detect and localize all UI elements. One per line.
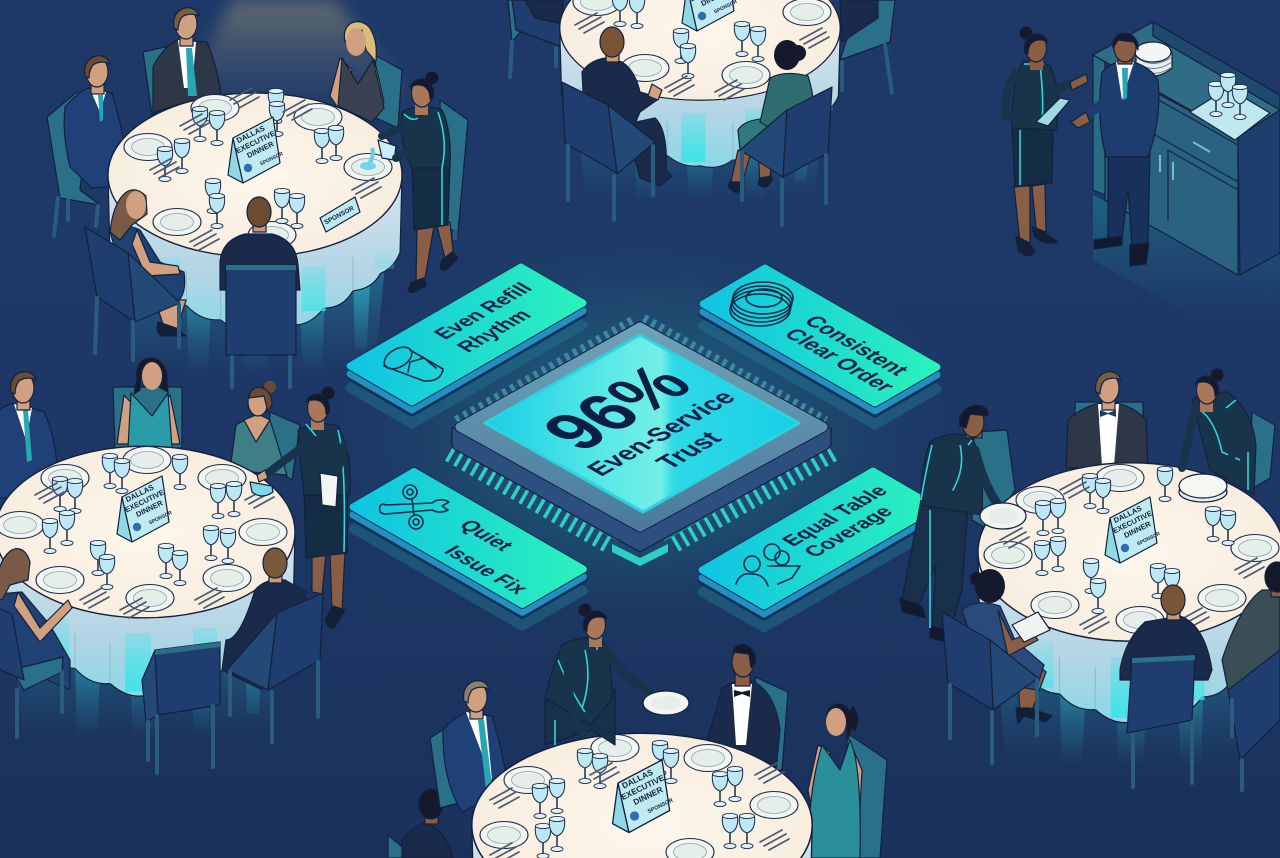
table sign: DINNER [1122, 519, 1153, 540]
table top with skirt [108, 93, 402, 373]
panel text: Clear Order [779, 325, 901, 396]
table sign: DINNER [632, 785, 664, 807]
chair behind waiter [972, 430, 1015, 530]
bottom-left man and chair [388, 789, 453, 858]
table sign: EXECUTIVE [123, 488, 166, 514]
table sign: SPONSOR [647, 798, 674, 815]
table sign: DALLAS [124, 483, 155, 504]
seated woman from behind with chair [85, 190, 186, 360]
table sign: EXECUTIVE [620, 773, 666, 802]
chip top edge pins [456, 318, 826, 420]
partly visible diners on far side of table [508, 0, 895, 93]
top-right service cart group [1005, 22, 1280, 320]
panel text [439, 517, 534, 598]
man in tuxedo with chair [708, 645, 788, 772]
table sign: EXECUTIVE [1111, 509, 1154, 535]
table sign [612, 760, 676, 832]
table sign: Dallas Executive Dinner: EXECUTIVE [234, 129, 277, 155]
panel text: Equal Table [777, 482, 893, 550]
empty chair at front [142, 642, 220, 773]
service cart [1093, 22, 1280, 275]
table sign: DINNER [134, 498, 165, 519]
small sponsor card [320, 197, 360, 232]
chip label: Trust [650, 428, 729, 473]
table sign: DALLAS [1112, 504, 1143, 525]
waiter in dark uniform serving [900, 405, 1026, 642]
stat panel: Consistent Clear Order [703, 268, 937, 425]
table top with skirt [472, 733, 812, 858]
stat panel: Quiet Issue Fix [353, 472, 583, 626]
place settings [124, 88, 392, 250]
panel text: Coverage [799, 503, 898, 561]
table top with skirt [560, 0, 840, 202]
top-left table group [47, 8, 468, 387]
seated man at far right with chair [1222, 562, 1280, 790]
seated woman front-left with chair [0, 549, 72, 737]
small sponsor card: SPONSOR [323, 205, 356, 226]
table sign: Dallas Executive Dinner [228, 117, 286, 183]
place settings [984, 464, 1279, 634]
chip base and rim [452, 428, 831, 552]
stat panel: Equal Table Coverage [702, 471, 935, 628]
floor reflection under cart [1093, 195, 1280, 320]
waitress clearing a plate [545, 604, 689, 745]
table sign: SPONSOR [1136, 531, 1162, 547]
man in navy suit at far left [0, 372, 58, 498]
table sign: Dallas Executive Dinner: DINNER [245, 139, 276, 160]
chip label: Even-Service [581, 387, 742, 480]
place settings [480, 734, 798, 858]
seated man right from behind with chair [222, 548, 323, 742]
icon: people [736, 544, 800, 586]
panel text: Even Refill [429, 280, 538, 343]
table sign: Dallas Executive Dinner: SPONSOR [259, 151, 285, 167]
table sign: SPONSOR [148, 510, 174, 526]
table top with skirt [978, 463, 1280, 767]
man from behind with chair [1120, 585, 1212, 787]
middle-right table group [900, 368, 1280, 790]
icon: stack of plates [730, 282, 793, 326]
headline number: 96% [524, 353, 709, 461]
blonde woman with chair [330, 22, 402, 128]
chair behind waitress [440, 100, 468, 238]
stat panel: Even Refill Rhythm [350, 267, 583, 424]
table sign: Dallas Executive Dinner: DALLAS [235, 124, 266, 145]
table sign [682, 0, 740, 31]
middle-left table group [0, 358, 350, 773]
chip screen [485, 335, 799, 512]
panel text: Quiet [454, 517, 518, 554]
man seen from behind with chair [562, 27, 672, 220]
table sign [1105, 497, 1163, 563]
panel text: Rhythm [452, 306, 537, 356]
table top with skirt [0, 446, 295, 739]
man in navy suit with chair [47, 56, 124, 236]
table sign [117, 476, 175, 542]
waitress clearing plates [1179, 368, 1256, 502]
waitress with tablet [1005, 26, 1088, 256]
table sign: DALLAS [621, 768, 655, 791]
chair behind waitress [1250, 412, 1275, 490]
panel text: Issue Fix [439, 543, 534, 598]
woman in green with chair [230, 381, 300, 480]
water pitcher [250, 482, 273, 496]
central chip: 96% Even-Service Trust [450, 318, 832, 566]
stack of plates on cart [1135, 42, 1172, 76]
woman seen from behind with chair [728, 40, 832, 225]
man from behind with chair [220, 197, 300, 387]
icon: wrench and gears [380, 485, 449, 529]
man in tuxedo with bow tie [1066, 372, 1148, 468]
man in navy suit with chair [430, 681, 508, 812]
central glow [322, 210, 962, 650]
chip pins [450, 444, 832, 544]
water being poured [360, 140, 396, 170]
icon: water glass [381, 343, 443, 381]
top-centre table group [508, 0, 895, 225]
bottom-centre table group [388, 604, 887, 858]
woman in teal with chair [808, 704, 887, 858]
spotlight beam [175, 0, 425, 110]
waiter in navy suit [1071, 33, 1159, 266]
seated woman with menu and chair [942, 569, 1052, 763]
man in charcoal suit with chair [143, 8, 221, 115]
waitress pouring water [382, 72, 458, 292]
place settings [573, 0, 831, 100]
waitress with towel [257, 386, 350, 628]
panel text: Consistent [799, 312, 915, 379]
woman in teal dress with chair [113, 358, 182, 448]
place settings [0, 446, 287, 618]
